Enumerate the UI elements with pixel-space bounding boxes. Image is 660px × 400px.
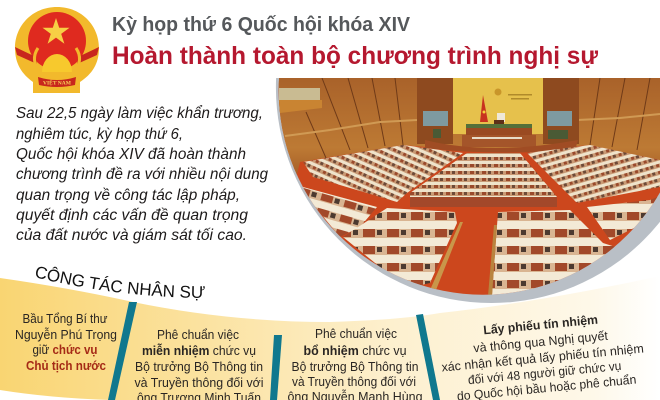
emblem banner [38, 77, 76, 87]
seat block: lower left [303, 187, 377, 237]
column 2: dismissal approval [134, 328, 264, 400]
column 4: confidence vote: Lấy phiếu tín nhiệm [483, 313, 599, 337]
yellow band background [0, 276, 660, 400]
intro text block: Sau 22,5 ngày làm việc khẩn trương, [16, 105, 263, 122]
intro text block: của đất nước và giám sát tối cao. [16, 227, 247, 244]
seat block: upper left [303, 145, 463, 202]
intro text block: nghiêm túc, kỳ họp thứ 6, [16, 126, 183, 143]
column 3: appointment approval: Phê chuẩn việc [315, 327, 397, 341]
seat block: far right [587, 196, 660, 240]
column 1: party chief elected president [15, 312, 117, 373]
column 4: confidence vote [441, 313, 644, 400]
column 3: appointment approval [288, 327, 423, 400]
intro text block: quan trọng về công tác lập pháp, [16, 187, 240, 204]
intro text block [16, 105, 268, 244]
emblem side ribbons [15, 47, 37, 64]
teal divider 2 [270, 335, 282, 400]
photo: National Assembly hall in a semicircle [276, 78, 660, 303]
column 4: confidence vote: và thông qua Nghị quyết [473, 329, 609, 355]
intro text block: quyết định các vấn đề quan trọng [16, 207, 248, 224]
flag [480, 95, 488, 122]
aisle edge [430, 222, 463, 290]
heading: personnel work: CÔNG TÁC NHÂN SỰ [36, 266, 205, 300]
seat block: upper right [527, 145, 660, 203]
heading: completed agenda: Hoàn thành toàn bộ chương trình nghị sự [112, 42, 599, 70]
column 3: appointment approval: bổ nhiệm chức vụ [304, 344, 407, 358]
column 4: confidence vote: đối với 48 người giữ chức vụ [467, 359, 622, 387]
column 1: party chief elected president: giữ chức vụ [32, 343, 98, 357]
column 1: party chief elected president: Nguyễn Phú Trọng [15, 327, 117, 342]
seat block: lower right [492, 210, 625, 295]
title: session name: Kỳ họp thứ 6 Quốc hội khóa XIV [112, 14, 411, 36]
state emblem of Vietnam [15, 7, 99, 93]
column 2: dismissal approval: miễn nhiệm chức vụ [142, 343, 256, 358]
intro text block: chương trình đề ra với nhiều nội dung [16, 166, 268, 183]
column 1: party chief elected president: Bầu Tổng Bí thư [22, 312, 108, 326]
column 1: party chief elected president: Chủ tịch nước [26, 359, 106, 373]
screens [423, 111, 448, 126]
seat block: lower centre left [343, 208, 457, 290]
photo content [276, 78, 660, 303]
seat block: centre [410, 153, 557, 197]
podium [497, 113, 505, 122]
column 3: appointment approval: và Truyền thông đối với [292, 375, 416, 389]
column 2: dismissal approval: Bộ trưởng Bộ Thông tin [135, 360, 263, 374]
intro text block: Quốc hội khóa XIV đã hoàn thành [16, 146, 246, 163]
column 3: appointment approval: Bộ trưởng Bộ Thông tin [292, 360, 419, 374]
teal divider 1 [108, 302, 137, 400]
emblem gold wreath [15, 7, 99, 93]
column 2: dismissal approval: và Truyền thông đối với [134, 376, 264, 390]
photo ring [276, 78, 660, 303]
teal divider 3 [416, 314, 440, 400]
state emblem of Vietnam: VIỆT NAM [43, 78, 72, 86]
column 2: dismissal approval: Phê chuẩn việc [157, 328, 239, 342]
column 4: confidence vote: xác nhận kết quả lấy phiếu tín nhiệm [441, 341, 644, 375]
